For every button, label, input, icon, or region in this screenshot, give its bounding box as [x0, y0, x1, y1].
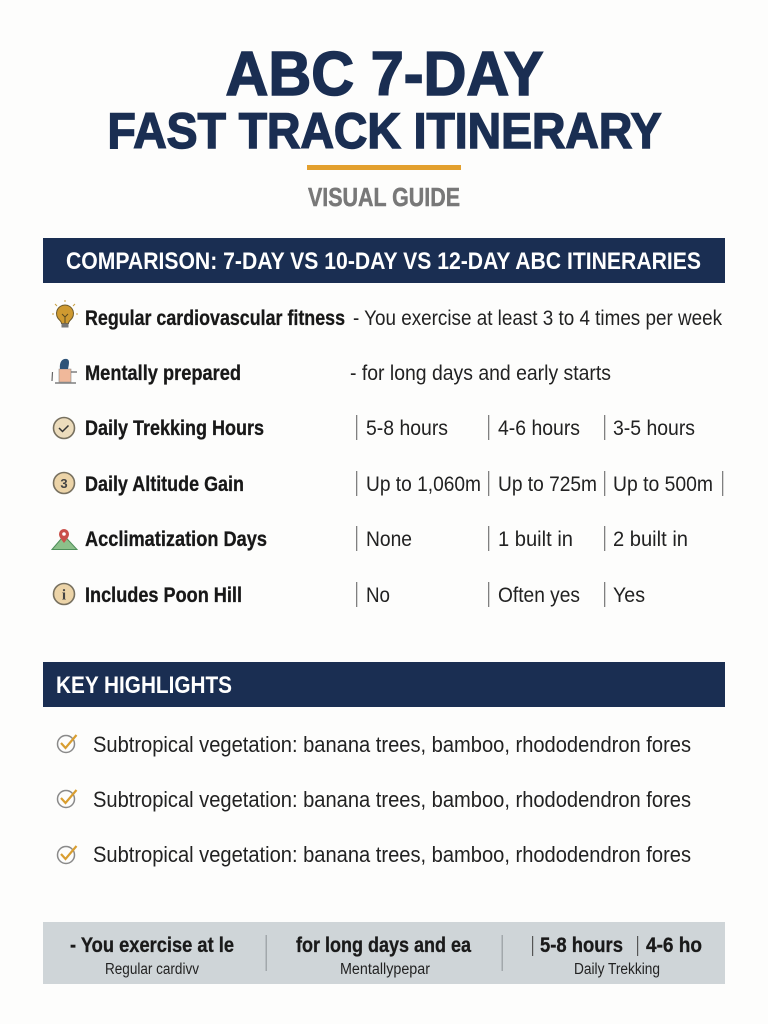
- row: daily trekking hours: 4-6 hours: [498, 416, 580, 440]
- icon: check: [58, 735, 76, 752]
- comparison banner: [43, 238, 725, 283]
- footer stat 3: [532, 934, 702, 978]
- icon: info badge: i: [62, 588, 66, 604]
- key highlights banner: KEY HIGHLIGHTS: [56, 672, 232, 699]
- icon: map pin on mountain: [52, 529, 77, 550]
- footer stat 3: 4-6 ho: [646, 934, 702, 957]
- title line 2: FAST TRACK ITINERARY: [108, 103, 662, 159]
- icon: number badge: 3: [60, 476, 68, 491]
- footer stat 2: for long days and ea: [296, 934, 471, 957]
- row: acclimatization days: 2 built in: [613, 527, 688, 551]
- row: acclimatization days: None: [366, 527, 412, 551]
- row: acclimatization days: 1 built in: [498, 527, 573, 551]
- row: mentally prepared: - for long days and early starts: [350, 361, 611, 385]
- row: daily altitude gain: Up to 500m: [613, 472, 713, 496]
- icon: info badge: [54, 584, 74, 604]
- highlight 2: Subtropical vegetation: banana trees, bamboo, rhododendron fores: [93, 787, 691, 812]
- icon: check badge: [54, 418, 74, 438]
- icon: check: [58, 846, 76, 864]
- row: daily trekking hours: [54, 415, 695, 440]
- icon: person: [52, 359, 77, 383]
- row: cardiovascular fitness: Regular cardiovascular fitness: [85, 307, 345, 330]
- row: daily altitude gain: Daily Altitude Gain: [85, 473, 244, 496]
- row: includes poon hill: [54, 582, 645, 607]
- row: includes poon hill: Yes: [613, 583, 645, 607]
- highlight 1: Subtropical vegetation: banana trees, bamboo, rhododendron fores: [93, 732, 691, 757]
- row: cardiovascular fitness: [52, 300, 722, 330]
- footer stat 1: [70, 934, 234, 978]
- panel: comparison table: [43, 238, 725, 607]
- panel: footer summary strip: [43, 922, 725, 984]
- panel: key highlights: [43, 662, 725, 867]
- icon: check: [58, 790, 76, 808]
- row: daily trekking hours: Daily Trekking Hours: [85, 417, 264, 440]
- row: daily trekking hours: 3-5 hours: [613, 416, 695, 440]
- comparison banner: COMPARISON: 7-DAY VS 10-DAY VS 12-DAY ABC ITINERARIES: [66, 248, 701, 275]
- row: daily altitude gain: [54, 471, 723, 496]
- row: acclimatization days: Acclimatization Days: [85, 528, 267, 551]
- icon: number badge: [54, 472, 74, 494]
- footer stat 3: 5-8 hours: [540, 934, 623, 957]
- footer stat 1: Regular cardivv: [105, 961, 199, 978]
- row: mentally prepared: Mentally prepared: [85, 362, 241, 385]
- key highlights banner: [43, 662, 725, 707]
- row: includes poon hill: Includes Poon Hill: [85, 584, 242, 607]
- gold accent rule: [307, 165, 461, 170]
- row: daily trekking hours: 5-8 hours: [366, 416, 448, 440]
- footer stat 1: - You exercise at le: [70, 934, 234, 957]
- row: daily altitude gain: Up to 1,060m: [366, 472, 481, 496]
- row: cardiovascular fitness: - You exercise at least 3 to 4 times per week: [353, 306, 722, 330]
- footer stat 3: Daily Trekking: [574, 961, 660, 978]
- highlight 3: Subtropical vegetation: banana trees, bamboo, rhododendron fores: [93, 842, 691, 867]
- footer stat 2: [296, 934, 471, 978]
- footer stat 2: Mentallypepar: [340, 961, 430, 978]
- title line 1: ABC 7-DAY: [226, 40, 544, 109]
- row: includes poon hill: No: [366, 583, 390, 607]
- subtitle: VISUAL GUIDE: [308, 182, 460, 212]
- row: acclimatization days: [52, 526, 688, 551]
- row: mentally prepared: [52, 359, 611, 385]
- icon: light bulb: [52, 300, 78, 328]
- row: includes poon hill: Often yes: [498, 583, 580, 607]
- row: daily altitude gain: Up to 725m: [498, 472, 597, 496]
